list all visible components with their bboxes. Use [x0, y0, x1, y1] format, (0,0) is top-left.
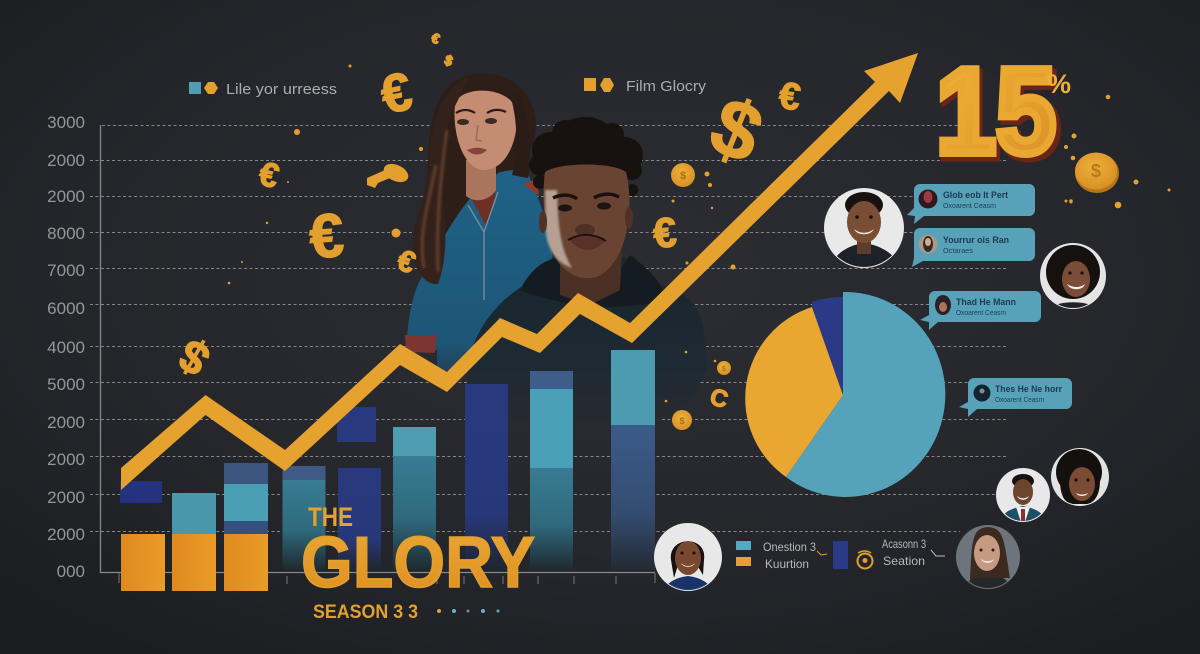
avatar: smiling woman curly hair — [1040, 243, 1106, 309]
title: THE — [308, 502, 353, 532]
bubble 3 — [920, 291, 1041, 330]
chart axes and grid — [90, 125, 1007, 584]
coins — [671, 152, 1119, 430]
y axis labels: 5000 — [47, 375, 85, 394]
bar 8 — [530, 371, 573, 570]
big percentage: % — [1047, 69, 1071, 99]
y axis labels: 3000 — [47, 113, 85, 132]
currency symbols: C — [707, 383, 731, 414]
y axis labels: 2000 — [47, 525, 85, 544]
legend: top left: Lile yor urreess — [226, 81, 337, 98]
avatars — [654, 188, 1109, 592]
currency symbols: € — [393, 244, 420, 281]
avatar: woman big hair — [1051, 448, 1109, 506]
person: man in dark hoodie — [467, 117, 708, 432]
big percentage: 15 — [938, 47, 1060, 183]
bar 2 — [172, 493, 216, 591]
bar 5 — [337, 407, 381, 570]
icon: large coin: $ — [1091, 161, 1101, 181]
y axis labels: 2000 — [47, 151, 85, 170]
avatar: smiling man in jacket — [824, 188, 904, 268]
pie chart — [745, 292, 945, 497]
currency symbols: $ — [170, 329, 218, 387]
currency symbols: € — [255, 155, 283, 196]
currency symbols: $ — [442, 51, 455, 69]
currency symbols — [170, 29, 803, 414]
bubble 2: Octaraes — [943, 246, 973, 255]
big percentage: 15 — [936, 43, 1056, 179]
currency symbols: € — [375, 61, 417, 126]
y axis labels: 2000 — [47, 450, 85, 469]
bubble 2 — [912, 228, 1035, 267]
bubble 3: Oxoarent Ceasm — [956, 308, 1006, 317]
bar 3 — [224, 463, 268, 591]
y axis labels: 2000 — [47, 488, 85, 507]
stacked bar chart — [120, 350, 655, 591]
legend: top centre: Film Glocry — [626, 78, 707, 95]
bar 7 — [465, 384, 508, 570]
bubble 3: Thad He Mann — [956, 297, 1016, 308]
bubble 4 — [959, 378, 1072, 417]
bar 4 — [282, 466, 326, 570]
bubble 1: Glob eob It Pert — [943, 190, 1009, 201]
bubble 1: Oxoarent Ceasm — [943, 201, 996, 210]
currency symbols: € — [776, 75, 803, 119]
legend: bottom: Seation — [883, 554, 925, 568]
icon: coin — [671, 163, 695, 187]
currency symbols: € — [429, 29, 442, 47]
legend: top centre — [584, 78, 707, 95]
icon: coin: $ — [680, 170, 686, 182]
currency symbols: € — [307, 201, 346, 272]
currency symbols: € — [651, 208, 678, 257]
bubble 2: Yourrur ois Ran — [943, 235, 1009, 246]
bubble 1 — [907, 184, 1035, 224]
icon: coin: $ — [722, 366, 726, 373]
bubble 4: Thes He Ne horr — [995, 384, 1062, 395]
y axis labels: 6000 — [47, 299, 85, 318]
growth line arrow — [121, 53, 918, 490]
scattered gold dots — [228, 64, 1170, 402]
icon: gold key — [367, 160, 411, 188]
y axis labels: 000 — [57, 562, 85, 581]
y axis labels: 8000 — [47, 224, 85, 243]
icon: large coin — [1075, 152, 1119, 193]
bubble 4: Oxoarent Ceasm — [995, 395, 1044, 404]
icon: coin: $ — [679, 416, 685, 426]
y axis labels — [47, 113, 85, 581]
bar 1 — [120, 481, 165, 591]
title: GLORY — [301, 523, 535, 603]
y axis labels: 2000 — [47, 187, 85, 206]
bar 9 — [611, 350, 655, 570]
legend: top left — [189, 81, 337, 98]
y axis labels: 4000 — [47, 338, 85, 357]
bar 6 — [393, 427, 436, 570]
icon: coin — [717, 361, 731, 375]
y axis labels: 2000 — [47, 413, 85, 432]
icon: coin — [672, 410, 692, 430]
speech bubbles — [907, 184, 1072, 417]
legend: bottom: Acasonn 3 — [882, 537, 926, 551]
legend: bottom: Onestion 3 — [763, 540, 816, 554]
title — [301, 502, 535, 623]
currency symbols: $ — [698, 80, 774, 181]
avatar: woman long brown hair — [956, 525, 1020, 590]
legend: bottom — [736, 537, 945, 571]
avatar: woman in blue shirt — [654, 523, 722, 592]
person: woman in blue jacket — [405, 73, 560, 385]
y axis labels: 7000 — [47, 261, 85, 280]
title: SEASON 3 3 — [313, 602, 418, 623]
avatar: man in suit — [996, 468, 1050, 522]
legend: bottom: Kuurtion — [765, 557, 809, 571]
